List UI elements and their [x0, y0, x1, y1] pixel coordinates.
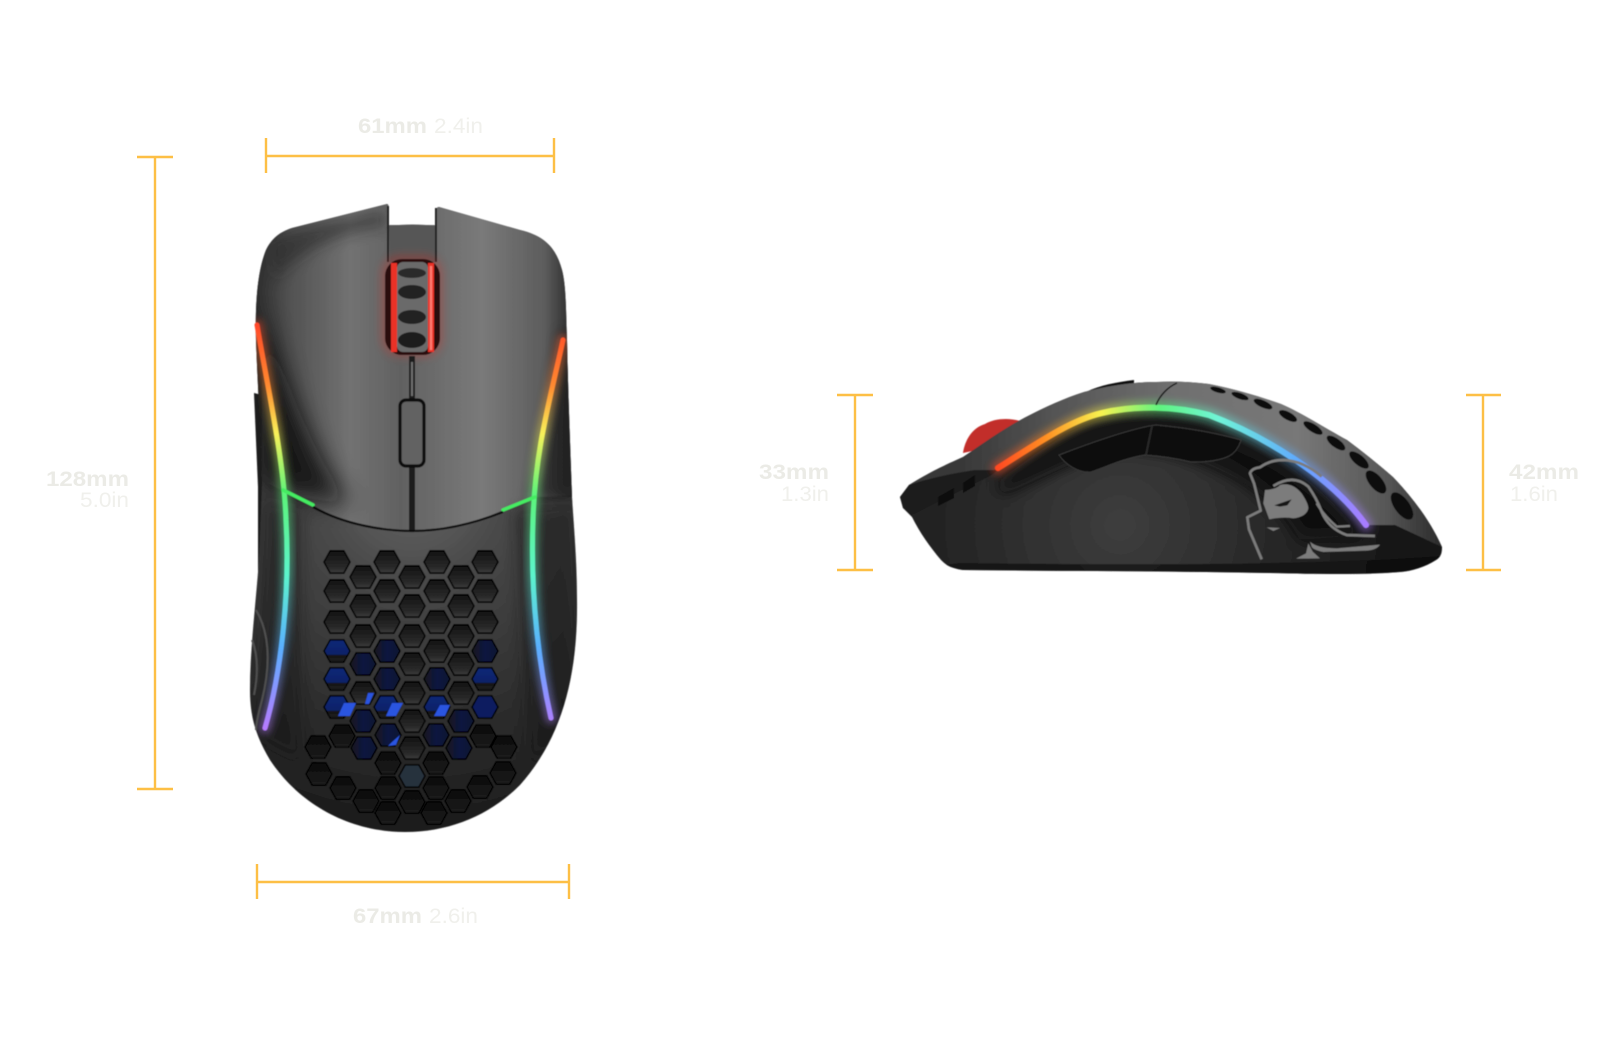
label: 42mm 1.6in — [1509, 461, 1579, 506]
label: 33mm 1.3in — [759, 461, 829, 506]
RGB left strip — [257, 325, 313, 728]
label: 42mm 1.6in: 42mm — [1509, 461, 1579, 484]
side buttons — [254, 393, 275, 590]
upper grey band — [900, 382, 1442, 580]
height measure: 42mm — [1466, 395, 1579, 570]
label: 128mm 5.0in — [46, 468, 129, 512]
top holes — [1210, 385, 1417, 523]
label: 61mm 2.4in — [358, 115, 483, 138]
label: 42mm 1.6in: 1.6in — [1510, 483, 1558, 506]
top button — [1086, 380, 1134, 396]
body with palm rest — [250, 204, 577, 832]
label: 128mm 5.0in: 5.0in — [80, 489, 129, 512]
label: 67mm 2.6in — [353, 905, 478, 928]
blue light accents — [338, 693, 450, 746]
vents — [938, 475, 975, 506]
label: 61mm 2.4in: 2.4in — [434, 115, 483, 138]
front shell — [900, 470, 998, 515]
seam — [313, 507, 503, 531]
label: 67mm 2.6in: 67mm — [353, 905, 422, 928]
mouse: side view — [900, 380, 1442, 580]
logo: bearded head — [1247, 460, 1380, 559]
label: 128mm 5.0in: 128mm — [46, 468, 129, 491]
button split lines — [388, 206, 436, 262]
label: 33mm 1.3in: 33mm — [759, 461, 829, 484]
body — [900, 382, 1442, 574]
height measure: 128mm — [46, 157, 173, 789]
scroll wheel, red — [963, 419, 1020, 453]
centre groove — [409, 356, 415, 530]
label: 67mm 2.6in: 2.6in — [429, 905, 478, 928]
button shading — [262, 212, 577, 760]
width measure: 61mm — [266, 115, 554, 173]
logo hint — [252, 610, 268, 730]
width measure: 67mm — [257, 864, 569, 928]
honeycomb vents — [305, 551, 517, 824]
height measure: 33mm — [759, 395, 873, 570]
RGB strip — [998, 408, 1366, 525]
label: 33mm 1.3in: 1.3in — [781, 483, 829, 506]
scroll wheel — [380, 254, 444, 358]
mouse: top view — [250, 204, 577, 832]
RGB right strip — [503, 340, 563, 718]
seam — [1156, 383, 1177, 405]
DPI button — [400, 400, 424, 466]
main buttons — [256, 204, 572, 531]
centre channel — [389, 224, 436, 262]
label: 61mm 2.4in: 61mm — [358, 115, 427, 138]
side buttons — [1059, 425, 1241, 472]
